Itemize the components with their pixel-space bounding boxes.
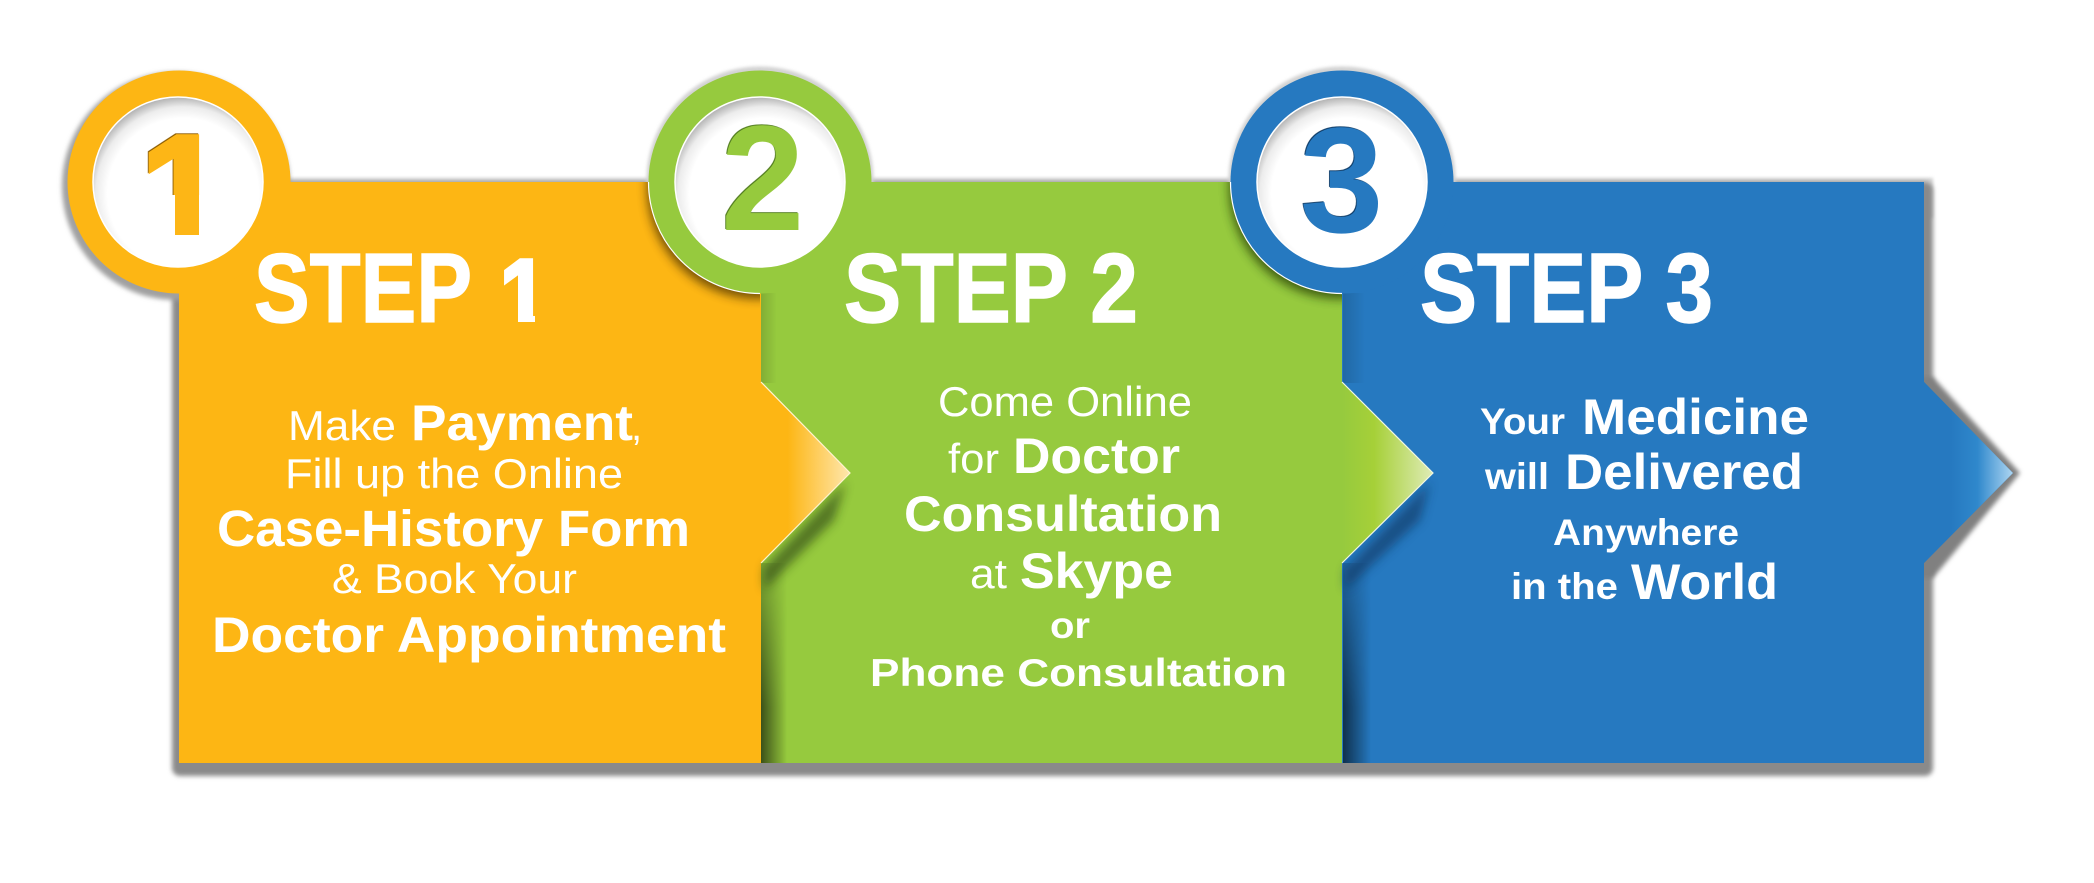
panel: step 1 — [179, 182, 850, 763]
text block: step 2 description: Come Online — [938, 378, 1192, 425]
text block: step 2 description: Skype — [1020, 543, 1173, 599]
text block: step 1 description: Case-History Form — [217, 500, 690, 557]
text block: step 2 description: at — [970, 550, 1007, 597]
text block: step 1 description: , — [631, 405, 642, 449]
text block: step 2 description: for — [948, 435, 999, 482]
heading: step 3: STEP 3 — [1420, 233, 1713, 343]
arrow: step 2 — [1342, 382, 1433, 563]
heading: step 1 — [256, 252, 535, 324]
infographic: three step process — [59, 65, 2022, 780]
text block: step 3 description: Anywhere — [1553, 512, 1739, 553]
heading: step 1: STEP — [254, 233, 472, 343]
text block: step 1 description: Doctor Appointment — [212, 607, 726, 663]
text block: step 3 description: World — [1631, 554, 1778, 610]
number 2: 2 — [721, 94, 804, 262]
text block: step 1 description: Payment — [411, 395, 633, 451]
text block: step 2 description — [870, 378, 1287, 695]
text block: step 2 description: Consultation — [904, 486, 1222, 542]
badge: step 2 circle — [647, 70, 872, 299]
text block: step 3 description: will — [1484, 456, 1549, 497]
badge: step 1 circle — [68, 70, 290, 294]
text block: step 2 description: Doctor — [1013, 428, 1180, 484]
text block: step 3 description: Your — [1480, 401, 1565, 442]
panel: step 3 — [1342, 182, 2013, 763]
text block: step 3 description — [1480, 389, 1809, 610]
heading: step 2: STEP 2 — [844, 233, 1138, 343]
text block: step 3 description: Delivered — [1565, 444, 1803, 500]
drop shadow silhouette — [62, 66, 2020, 776]
arrow: step 3 — [1924, 382, 2013, 563]
text block: step 2 description: or — [1050, 605, 1090, 646]
arrow: step 1 — [761, 382, 850, 563]
text block: step 2 description: Phone Consultation — [870, 652, 1287, 695]
number 1: 1 — [141, 104, 224, 272]
text block: step 1 description: Fill up the Online — [285, 450, 623, 497]
text block: step 1 description: & Book Your — [332, 555, 577, 602]
text block: step 1 description: Make — [288, 402, 396, 449]
number 3: 3 — [1300, 96, 1383, 264]
panel: step 2 — [760, 182, 1433, 763]
text block: step 3 description: Medicine — [1582, 389, 1809, 445]
badge: step 3 circle — [1229, 70, 1454, 299]
text block: step 3 description: in the — [1511, 566, 1618, 607]
heading: step 1: 1 — [500, 239, 547, 349]
text block: step 1 description — [212, 395, 726, 663]
